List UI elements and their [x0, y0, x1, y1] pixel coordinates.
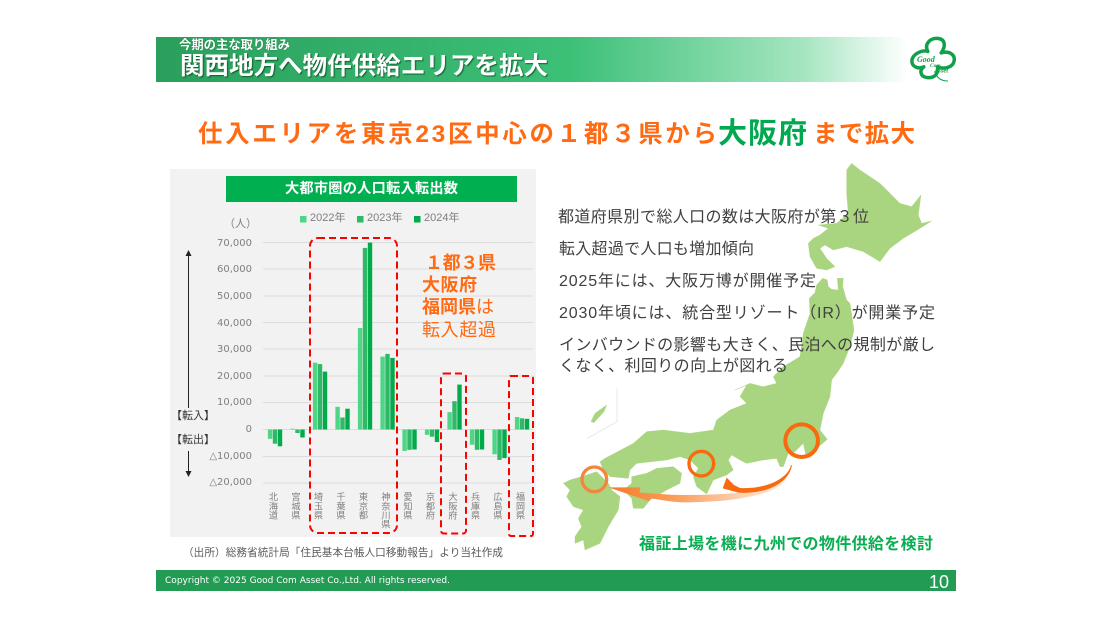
map of Japan: [563, 163, 932, 550]
logo: Good Com Asset clover: Good: [917, 55, 936, 64]
bullet list: [558, 208, 935, 375]
bullet list: 2025年には、大阪万博が開催予定: [559, 272, 816, 290]
island inset line: [587, 388, 617, 438]
source note: （出所）総務省統計局「住民基本台帳人口移動報告」より当社作成: [183, 546, 503, 559]
bullet list: インバウンドの影響も大きく、民泊への規制が厳し: [559, 336, 935, 354]
circle: Osaka: [689, 451, 714, 476]
main headline: 仕入エリアを東京23区中心の１都３県から: [198, 120, 717, 148]
axis direction: inflow arrow: [171, 250, 215, 422]
highlight: 1都3県: [310, 238, 397, 533]
main headline: [198, 117, 915, 150]
header band: [156, 37, 908, 82]
unit label: （人）: [224, 217, 257, 230]
category labels: 東京都: [358, 491, 368, 520]
footer bar: [156, 570, 956, 592]
header title: 関西地方へ物件供給エリアを拡大: [180, 52, 548, 80]
Sado-area island: [591, 405, 607, 423]
category labels: 埼玉県: [312, 491, 323, 520]
bullet list: 都道府県別で総人口の数は大阪府が第３位: [558, 208, 869, 226]
logo: Good Com Asset clover: Com: [930, 63, 941, 69]
axis direction: outflow arrow: 【転出】: [171, 433, 215, 446]
highlight: 福岡県: [509, 376, 533, 536]
category labels: 北海道: [268, 492, 278, 520]
bullet list: くなく、利回りの向上が図れる: [559, 357, 788, 375]
y axis labels: 70,000: [217, 238, 252, 249]
arrow: Tokyo to Osaka: [723, 465, 792, 493]
category labels: 京都府: [424, 492, 435, 520]
Honshu: [600, 278, 854, 494]
bullet list: 転入超過で人口も増加傾向: [559, 240, 754, 258]
y axis labels: 20,000: [217, 371, 252, 382]
category labels: 宮城県: [290, 491, 301, 520]
legend: 2023年: [367, 210, 402, 224]
chart title bar: [226, 176, 517, 202]
callout: net inflow: [422, 253, 496, 340]
main headline: 大阪府: [718, 117, 807, 150]
Kyushu: [563, 472, 620, 550]
axis direction: outflow arrow: [171, 433, 215, 477]
Kyushu note: 福証上場を機に九州での物件供給を検討: [639, 534, 933, 553]
category labels: 千葉県: [335, 492, 346, 520]
panel: population chart: [170, 169, 536, 537]
y axis labels: 10,000: [217, 397, 252, 408]
callout: net inflow: 福岡県は: [422, 297, 494, 317]
category labels: 神奈川県: [380, 491, 391, 530]
y axis labels: 60,000: [217, 264, 252, 275]
page number: 10: [929, 572, 949, 592]
region circles and arrows: [582, 424, 818, 502]
y axis labels: △20,000: [209, 477, 252, 488]
callout: net inflow: １都３県: [425, 253, 496, 273]
callout: net inflow: 大阪府: [422, 275, 477, 295]
legend: 2024年: [424, 210, 459, 224]
highlight: 大阪府: [441, 374, 466, 534]
y axis labels: 0: [246, 424, 252, 435]
header subtitle: 今期の主な取り組み: [179, 37, 290, 52]
y axis labels: 30,000: [217, 344, 252, 355]
circle: Tokyo: [785, 424, 818, 457]
axis direction: inflow arrow: 【転入】: [171, 409, 215, 422]
circle: Fukuoka: [582, 467, 607, 492]
bars: [268, 243, 529, 460]
y axis labels: 40,000: [217, 318, 252, 329]
category labels: 兵庫県: [470, 491, 480, 520]
category labels: 広島県: [492, 492, 503, 520]
Hokkaido: [808, 163, 932, 270]
y axis labels: △10,000: [209, 451, 252, 462]
category labels: [268, 491, 525, 530]
legend: [300, 210, 459, 224]
main headline: まで拡大: [813, 120, 915, 148]
y axis labels: 50,000: [217, 291, 252, 302]
gridlines: [263, 242, 533, 483]
callout: net inflow: 転入超過: [422, 320, 496, 340]
category labels: 愛知県: [402, 491, 413, 520]
bullet list: 2030年頃には、統合型リゾート（IR）が開業予定: [559, 304, 935, 322]
y axis labels: [209, 238, 252, 488]
copyright: Copyright © 2025 Good Com Asset Co.,Ltd. All rights reserved.: [165, 576, 450, 586]
Shikoku: [623, 467, 682, 508]
logo: Good Com Asset clover: Asset: [933, 68, 948, 74]
category labels: 大阪府: [447, 491, 458, 520]
arrow: to Fukuoka: [608, 477, 791, 502]
legend: 2022年: [310, 210, 345, 224]
logo: Good Com Asset clover: [912, 38, 954, 81]
category labels: 福岡県: [514, 491, 525, 520]
chart title bar: 大都市圏の人口転入転出数: [285, 180, 458, 197]
